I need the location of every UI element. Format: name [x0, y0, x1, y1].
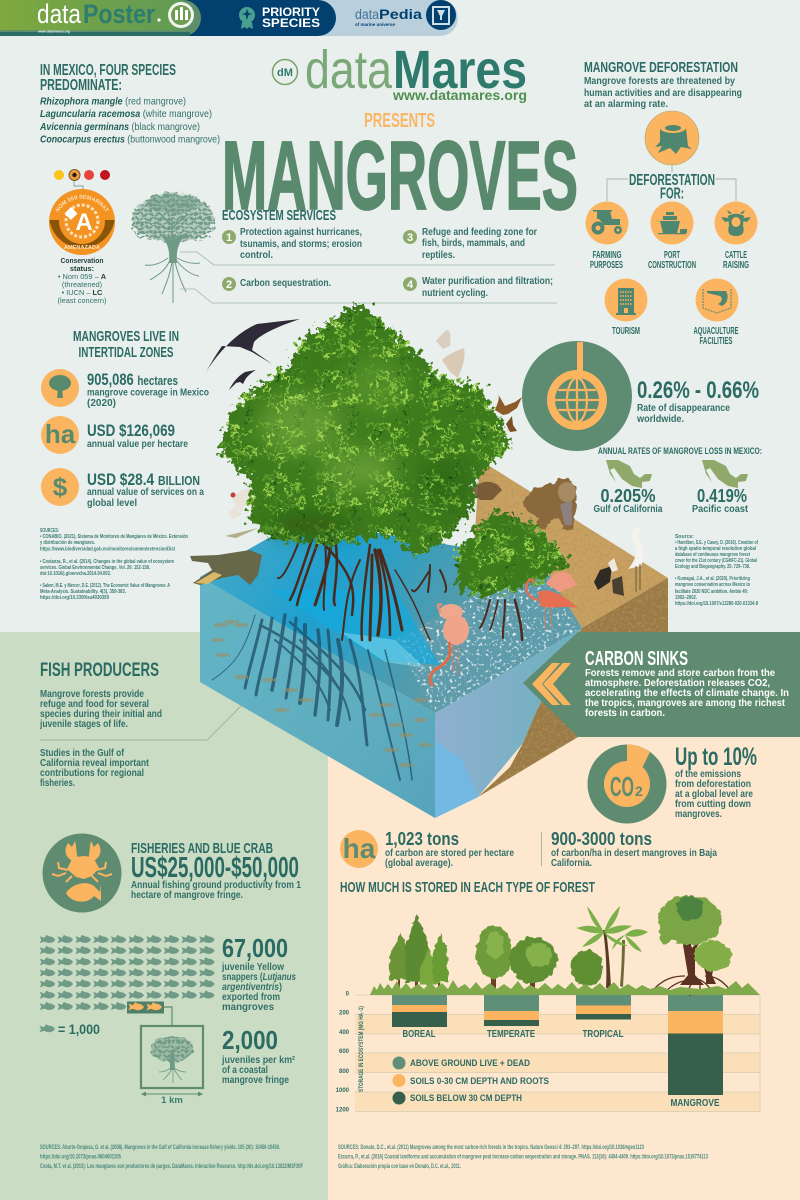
square kilometre box with tree	[141, 1026, 203, 1106]
mangrove deforestation text: human activities and are disappearing	[584, 87, 742, 99]
chart axis: 1200	[336, 1108, 350, 1114]
species list: Laguncularia racemosa (white mangrove)	[40, 108, 212, 120]
stat: value per hectare: ha	[45, 419, 76, 449]
cause labels: TOURISM	[612, 326, 640, 337]
fish legend	[40, 1021, 100, 1037]
stat: global value: annual value of services on a	[87, 486, 204, 498]
stat: hectares: 905,086 hectares	[87, 370, 178, 389]
ecosystem services list: reptiles.	[422, 249, 455, 261]
icon: cow	[714, 202, 758, 244]
water left face	[200, 577, 435, 818]
aerial roots	[278, 500, 522, 640]
small mangrove bush	[455, 508, 570, 598]
chart axis: STORAGE IN ECOSYSTEM (MG HA -1)	[358, 1006, 365, 1092]
fisheries and blue crab text: hectare of mangrove fringe.	[131, 889, 243, 901]
annual loss rates: Pacific coast	[692, 503, 748, 515]
dataPoster logo: www.datamares.org	[37, 30, 70, 34]
sources right: 1992–2002.	[675, 595, 697, 601]
footer sources right	[338, 1145, 708, 1170]
footer sources right: SOURCES: Donato, D.C., et.al. (2011) Mangroves among the most carbon-rich forests in the tropics. Nature Geosci 4: 293–297. https://doi.org/10.1038/ngeo1123	[338, 1145, 644, 1151]
panel: fish producers background	[0, 632, 328, 1200]
chart legend	[392, 1056, 549, 1104]
pictogram: highlighted fish	[127, 1002, 172, 1026]
desert mangrove stat: of carbon/ha in desert mangroves in Baja	[551, 847, 717, 859]
sources right: • Kumagai, J.A., et al. (2020). Prioritizing	[675, 576, 750, 582]
mangroves live in intertidal zones heading	[73, 328, 179, 361]
mangrove deforestation text: at an alarming rate.	[584, 98, 668, 110]
priority species badge: PRIORITY	[262, 5, 320, 19]
annual loss rates	[594, 446, 762, 515]
species heading: PREDOMINATE:	[40, 77, 122, 94]
carbon sinks banner: forests in carbon.	[585, 707, 665, 719]
up to 10 percent text: from deforestation	[675, 778, 751, 790]
ecosystem services list: fish, birds, mammals, and	[422, 237, 525, 249]
sources left: Meta-Analysis. Sustainability. 4(3), 359-383.	[40, 589, 126, 595]
ecosystem services list: 3	[407, 232, 413, 244]
conservation status badge	[49, 169, 115, 255]
how much stored heading: HOW MUCH IS STORED IN EACH TYPE OF FOREST	[340, 879, 595, 896]
dataMares logo: data	[305, 40, 393, 100]
up to 10 percent text: of the emissions	[675, 768, 741, 780]
sources left: • CONABIO. (2021). Sistema de Monitoreo de Manglares de México. Extensión	[40, 534, 188, 540]
dataMares logo: dM	[277, 67, 293, 79]
cause labels: FACILITIES	[700, 336, 733, 347]
dataMares logo: www.datamares.org	[392, 88, 527, 103]
ecosystem services list: 1	[226, 232, 232, 244]
deforestation causes diagram: DEFORESTATION	[629, 172, 715, 189]
fish producers text: Mangrove forests provide	[40, 688, 144, 700]
carbon storage chart	[336, 992, 760, 1114]
conservation status text: (least concern)	[58, 296, 106, 305]
canopy shading	[258, 355, 471, 535]
carbon per hectare stat: ha	[343, 833, 376, 864]
sources left: https://doi.org/10.3390/su4030359	[40, 595, 109, 601]
priority species badge	[239, 5, 320, 30]
dataPoster logo	[37, 0, 194, 34]
ecosystem services heading: ECOSYSTEM SERVICES	[222, 207, 336, 224]
sources right: Ecology and Biogeography. 25: 729–738.	[675, 564, 750, 570]
stat: 67,000 snappers: exported from	[222, 991, 280, 1003]
fish school	[210, 620, 433, 768]
species heading: IN MEXICO, FOUR SPECIES	[40, 62, 176, 79]
dataPedia logo: of marine universe	[355, 22, 396, 27]
carbon sinks banner: atmosphere. Deforestation releases CO2,	[585, 677, 770, 689]
animals: flamingos	[430, 572, 578, 686]
header banner	[0, 0, 458, 36]
carbon per hectare stat: (global average).	[385, 857, 453, 869]
stat: 67,000 snappers: 67,000	[222, 933, 288, 963]
chart axis: 800	[339, 1069, 350, 1075]
stat: 67,000 snappers: argentiventris)	[222, 981, 282, 993]
chart axis: 200	[339, 1010, 350, 1016]
chart axis: 600	[339, 1049, 350, 1055]
footer sources right: Gráfica: Elaboración propia con base en Donato, D.C. et.al., 2011.	[338, 1164, 461, 1170]
chart axis: 400	[339, 1030, 350, 1036]
up to 10 percent text: Up to 10%	[675, 743, 757, 771]
cause labels: PURPOSES	[590, 260, 623, 271]
sources left: doi:10.1016/j.gloenvcha.2014.04.002.	[40, 571, 111, 577]
icon: tree	[132, 192, 214, 303]
sources left: y distribución de manglares.	[40, 540, 95, 546]
fish producers text: species during their initial and	[40, 708, 162, 720]
disappearance rate text: Rate of disappearance	[637, 402, 730, 414]
tropical trees	[571, 906, 648, 988]
footer sources left: SOURCES: Aburto-Oropeza, O. et al. (2008). Mangroves in the Gulf of California increase fishery yields. 105 (30): 10456-10459.	[40, 1145, 280, 1151]
fish producers text: juvenile stages of life.	[39, 718, 128, 730]
cause labels: CATTLE	[725, 250, 747, 261]
fisheries and blue crab text: Annual fishing ground productivity from 1	[131, 879, 301, 891]
species list: Conocarpus erectus (buttonwood mangrove)	[40, 134, 220, 146]
illustration: mangrove island block	[190, 303, 668, 818]
up to 10 percent text	[675, 743, 757, 820]
deforestation causes diagram	[586, 111, 758, 347]
animal: crocodile	[190, 528, 262, 585]
chart axis: 0	[346, 992, 350, 998]
conservation status text: Conservation	[60, 256, 104, 265]
sparkling water	[395, 560, 582, 713]
bar: mangrove	[668, 995, 723, 1109]
fish producers text	[39, 660, 162, 789]
illustration: forest types	[370, 895, 760, 996]
fisheries and blue crab text: US$25,000-$50,000	[131, 852, 299, 884]
sources left: • Costanza, R., et al. (2014). Changes in the global value of ecosystem	[40, 559, 174, 565]
conservation status badge: AMENAZADA	[64, 245, 100, 251]
sources right: https://doi.org/10.1007/s13280-020-01334-8	[675, 601, 758, 607]
sources right	[675, 534, 758, 607]
deforestation causes diagram: FOR:	[660, 186, 684, 202]
footer sources left: Costa, M.T. et al. (2015): Los manglares son productores de pargos. DataMares. Interactive Resource. http://dx.doi.org/10.13022/M3F30F	[40, 1164, 303, 1170]
dataPedia logo: data	[355, 6, 379, 22]
main tree canopy	[218, 303, 512, 558]
temperate trees	[476, 925, 557, 994]
conservation status text: • IUCN – LC	[62, 288, 103, 297]
stat: global value	[41, 468, 204, 509]
carbon sinks banner: Forests remove and store carbon from the	[585, 667, 775, 679]
stat: 2,000 juveniles: juveniles per km²	[221, 1054, 295, 1066]
chart legend: ABOVE GROUND LIVE + DEAD	[410, 1058, 530, 1069]
bar: tropical	[576, 995, 631, 1040]
presents label: PRESENTS	[364, 110, 435, 132]
mangroves live in intertidal zones heading: MANGROVES LIVE IN	[73, 328, 179, 345]
sources right: cover for the 21st century (CGMFC-21). Global	[675, 558, 757, 564]
bar: boreal	[392, 995, 447, 1040]
annual loss rates: 0.419%	[697, 486, 747, 506]
sources left: SOURCES:	[40, 528, 59, 534]
disappearance rate text: 0.26% - 0.66%	[637, 377, 759, 404]
conservation status text	[58, 256, 107, 305]
bar: tropical: TROPICAL	[582, 1029, 624, 1040]
stat: value per hectare: annual value per hectare	[87, 438, 188, 450]
sources right: • Hamilton, S.E. y Casey, D. (2016). Creation of	[675, 540, 758, 546]
fish producers text: FISH PRODUCERS	[40, 660, 159, 681]
fish producers text: contributions for regional	[40, 767, 144, 779]
ecosystem services list	[222, 226, 553, 299]
connector: tree to services	[180, 252, 557, 303]
species list: Avicennia germinans (black mangrove)	[39, 121, 200, 133]
cause labels: RAISING	[723, 260, 749, 271]
up to 10 percent text: from cutting down	[675, 798, 751, 810]
pictogram: fish grid	[40, 935, 215, 1010]
desert mangrove stat	[541, 829, 717, 869]
stat: hectares	[41, 369, 209, 409]
priority species badge: SPECIES	[262, 16, 320, 30]
mangrove deforestation text: Mangrove forests are threatened by	[584, 75, 735, 87]
bar: mangrove: MANGROVE	[670, 1098, 720, 1109]
sources right: facilitate 2020 NDC ambition. Ambio 49:	[675, 589, 748, 595]
disappearance rate text: worldwide.	[636, 413, 684, 425]
stat: global value: $	[53, 472, 68, 502]
animal: jaguar	[523, 477, 576, 530]
disappearance rate text	[636, 377, 759, 425]
sources right: a high spatio-temporal resolution global	[675, 546, 756, 552]
ecosystem services list: control.	[240, 249, 273, 261]
icon: hotel	[604, 278, 648, 322]
dataMares logo: Mares	[393, 40, 527, 100]
carbon sinks banner: CARBON SINKS	[585, 648, 688, 670]
stat: value per hectare: USD $126,069	[87, 421, 175, 440]
sources left: services. Global Environmental Change. Vol. 26: 152-158.	[40, 565, 150, 571]
stat: global value: global level	[87, 497, 137, 509]
mangroves live in intertidal zones heading: INTERTIDAL ZONES	[78, 344, 174, 361]
grass strip	[370, 980, 760, 995]
connector: fish producers to cube	[40, 705, 242, 740]
water right face	[435, 628, 582, 818]
up to 10 percent text: at a global level are	[675, 788, 753, 800]
animals: heron and shore birds	[594, 528, 644, 596]
stat: 67,000 snappers: mangroves	[222, 1001, 274, 1013]
ecosystem services list: 4	[407, 279, 414, 291]
mangrove deforestation text: MANGROVE DEFORESTATION	[584, 59, 738, 76]
fish producers text: fisheries.	[40, 777, 75, 789]
CO2 donut: CO	[610, 771, 634, 802]
stat: 2,000 juveniles: of a coastal	[222, 1064, 268, 1076]
mangrove trees	[655, 895, 732, 996]
sources right: database of continuous mangrove forest	[675, 552, 750, 558]
dataMares logo	[272, 40, 527, 103]
sources left: • Salem, M.E. y Mercer, D.E. (2012). The Economic Value of Mangroves: A	[40, 583, 170, 589]
fisheries and blue crab text	[131, 840, 301, 901]
cause labels: FARMING	[592, 250, 622, 261]
ecosystem services list: Carbon sequestration.	[240, 277, 331, 289]
icon: aquaculture	[696, 278, 738, 322]
fish producers text: Studies in the Gulf of	[40, 747, 124, 759]
up to 10 percent text: mangroves.	[675, 808, 722, 820]
chart legend: SOILS BELOW 30 CM DEPTH	[410, 1093, 522, 1104]
stat: hectares: (2020)	[87, 397, 116, 409]
fisheries and blue crab text: FISHERIES AND BLUE CRAB	[131, 840, 273, 857]
submerged roots	[212, 615, 412, 780]
icon: port ship	[650, 202, 694, 244]
sources left: https://www.biodiversidad.gob.mx/monitoreo/smmm/extensionDist	[40, 546, 175, 552]
species heading	[40, 62, 176, 94]
boreal trees	[389, 914, 448, 992]
footer sources left: https://doi.org/10.1073/pnas.0804601105	[40, 1154, 121, 1160]
CO2 donut: 2	[635, 783, 643, 799]
sources right: mangrove conservation across Mexico to	[675, 582, 750, 588]
icon: tractor	[586, 202, 628, 244]
icon: map of Mexico Gulf of California	[606, 460, 652, 488]
stat: 2,000 juveniles: mangrove fringe	[222, 1074, 289, 1086]
sources left	[40, 528, 188, 601]
page background	[0, 0, 800, 632]
icon: chevrons	[532, 663, 571, 705]
cause labels	[590, 250, 749, 347]
ecosystem services list: Refuge and feeding zone for	[422, 226, 537, 238]
panel: carbon background	[328, 632, 800, 1200]
cause labels: CONSTRUCTION	[648, 260, 696, 271]
sources right: Source:	[675, 534, 694, 540]
footer sources left	[40, 1145, 303, 1170]
mangrove deforestation text	[584, 59, 742, 110]
carbon sinks banner	[523, 632, 800, 737]
sand surface	[470, 460, 668, 628]
water surface	[200, 520, 582, 713]
stat: value per hectare	[41, 416, 188, 454]
dataPedia logo	[355, 0, 456, 30]
chart axis: 1000	[336, 1088, 350, 1094]
carbon per hectare stat: 1,023 tons	[385, 829, 459, 849]
fish producers text: refuge and food for several	[40, 698, 149, 710]
species list	[39, 96, 220, 146]
fish producers text: California reveal important	[40, 757, 149, 769]
desert mangrove stat: California.	[551, 857, 592, 869]
conservation status text: • Nom 059 – A	[58, 272, 107, 281]
ecosystem services list: Protection against hurricanes,	[240, 226, 362, 238]
birds: frigatebirds	[206, 319, 300, 390]
cause labels: AQUACULTURE	[694, 326, 739, 337]
stat: global value: USD $28.4 BILLION	[87, 470, 200, 489]
square kilometre box with tree: 1 km	[161, 1095, 183, 1106]
icon: crab and fish	[42, 834, 122, 912]
cause labels: PORT	[664, 250, 680, 261]
annual loss rates: Gulf of California	[594, 503, 663, 515]
chart legend: SOILS 0-30 CM DEPTH AND ROOTS	[410, 1076, 549, 1087]
conservation status badge: A	[75, 209, 93, 236]
conservation status text: status:	[70, 264, 94, 273]
conservation status text: (threatened)	[62, 280, 102, 289]
ecosystem services list: 2	[226, 279, 232, 291]
icon: tree stump	[645, 111, 699, 165]
species list: Rhizophora mangle (red mangrove)	[40, 96, 186, 108]
carbon per hectare stat: of carbon are stored per hectare	[385, 847, 514, 859]
ecosystem services list: nutrient cycling.	[422, 287, 488, 299]
sediment	[478, 578, 668, 797]
stat: 67,000 snappers	[221, 933, 296, 1013]
ecosystem services list: Water purification and filtration;	[422, 275, 553, 287]
carbon per hectare stat	[340, 829, 514, 869]
bar: boreal: BOREAL	[402, 1029, 436, 1040]
conservation status badge: NOM 059 SEMARNAT	[55, 194, 109, 212]
fish legend: = 1,000	[58, 1021, 100, 1037]
stat: 67,000 snappers: snappers (Lutjanus	[222, 971, 296, 983]
icon: map of Mexico Pacific coast	[702, 460, 748, 488]
stat: 2,000 juveniles	[221, 1025, 295, 1086]
CO2 donut	[588, 744, 666, 824]
stat: 2,000 juveniles: 2,000	[222, 1025, 278, 1055]
disappearance rate circle	[522, 341, 632, 451]
bar: temperate	[484, 995, 539, 1040]
chart axis	[336, 992, 365, 1114]
desert mangrove stat: 900-3000 tons	[551, 829, 652, 849]
stat: hectares: mangrove coverage in Mexico	[87, 386, 209, 398]
bar: temperate: TEMPERATE	[487, 1029, 535, 1040]
annual loss rates: 0.205%	[600, 486, 656, 506]
dataPedia logo: Pedia	[379, 6, 422, 22]
birds: small birds in flight	[228, 330, 522, 519]
stat: 67,000 snappers: juvenile Yellow	[221, 961, 285, 973]
ecosystem services list: tsunamis, and storms; erosion	[240, 238, 362, 250]
